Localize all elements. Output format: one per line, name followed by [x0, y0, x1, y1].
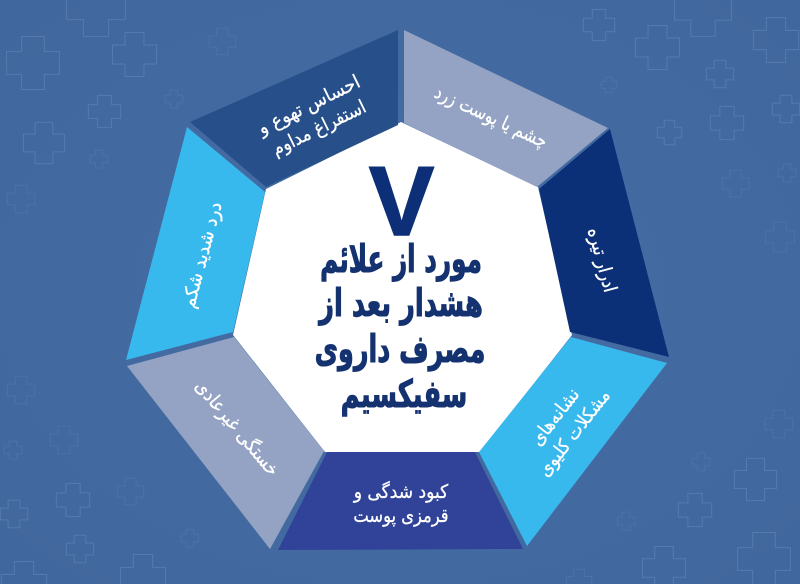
label: kidney problems line two: مشکلات کلیوی: [533, 385, 615, 481]
segment: yellow eyes or skin: [404, 30, 608, 187]
title: هشدار بعد از: [318, 281, 483, 325]
segment: severe abdominal pain: [126, 127, 265, 360]
label: bruising line one: کبود شدگی و: [353, 480, 449, 503]
label: unusual fatigue: خستگی غیرعادی: [190, 375, 284, 481]
segment: unusual fatigue: [127, 337, 324, 549]
segment: bruising and skin redness: [278, 452, 523, 550]
title: سفیکسیم: [341, 372, 467, 416]
title: [315, 236, 485, 416]
title: مصرف داروی: [315, 327, 485, 371]
segment: dark urine: [539, 129, 669, 357]
big number seven: V: [369, 146, 434, 256]
segment: kidney problems: [479, 337, 667, 546]
label: severe abdominal pain: درد شدید شکم: [178, 200, 227, 310]
label: dark urine: ادرار تیره: [583, 225, 621, 295]
segment: nausea and vomiting: [190, 30, 398, 187]
title: مورد از علائم: [320, 236, 482, 281]
label: nausea line one: احساس تهوع و: [254, 71, 364, 140]
label: kidney problems line one: نشانه‌های: [526, 384, 584, 450]
center heptagon: [233, 122, 572, 452]
label: nausea line two: استفراغ مداوم: [268, 96, 370, 161]
label: yellow eyes or skin: چشم یا پوست زرد: [431, 82, 551, 153]
label: bruising line two: قرمزی پوست: [353, 506, 449, 527]
